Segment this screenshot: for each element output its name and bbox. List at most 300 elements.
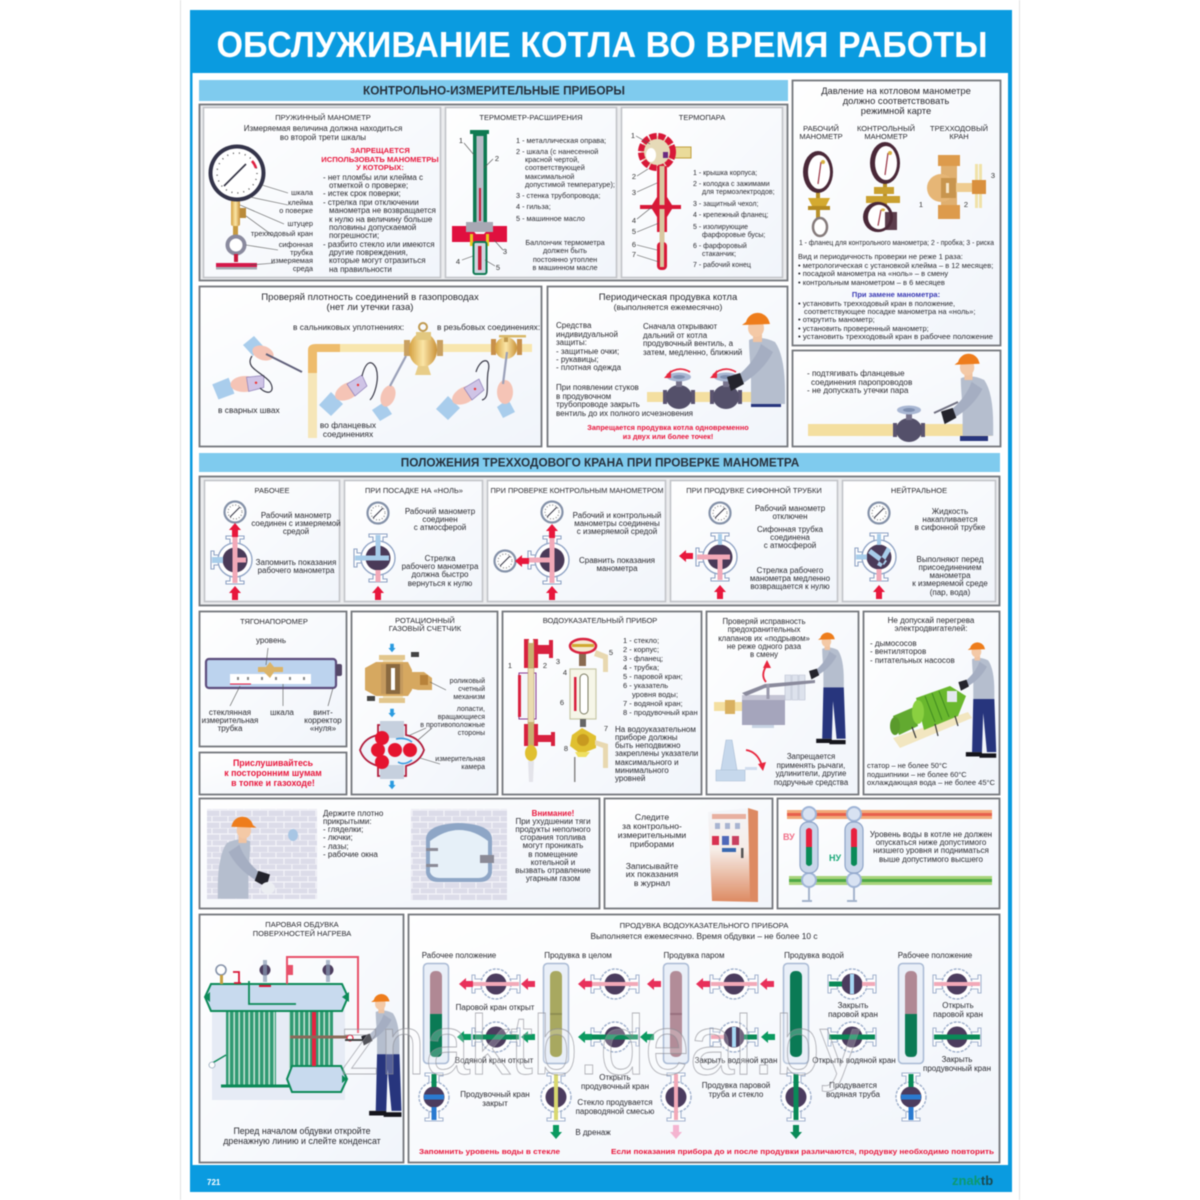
gauge part labels: сифонная xyxy=(279,240,313,249)
level markers xyxy=(783,832,841,863)
heading: indicator blowdown: Выполняется ежемесячно. Время обдувки – не более 10 с xyxy=(590,931,818,941)
gauge part labels: шкала xyxy=(291,188,314,197)
safety valve instructions: предохранительных xyxy=(728,625,800,634)
valve captions: Открыть водяной кран xyxy=(812,1056,896,1065)
thermocouple legend: 7 - рабочий конец xyxy=(693,261,751,269)
heading: pressure: режимной карте xyxy=(861,105,931,116)
temperature limits: подшипники – не более 60°С xyxy=(867,770,967,779)
thermometer note: постоянно утоплен xyxy=(533,255,597,264)
labels: connection types: соединениях xyxy=(323,429,374,439)
text: neutral: манометра xyxy=(929,571,971,580)
prohibition list: на правильности xyxy=(329,265,392,274)
text: zero: вернуться к нулю xyxy=(408,579,472,588)
thermocouple legend: 1 - крышка корпуса; xyxy=(693,170,757,177)
illustration: indicator front view: 5 xyxy=(609,648,613,657)
footer logo: znaktb xyxy=(952,1173,993,1188)
thermometer legend: допустимой температуре); xyxy=(525,180,615,189)
gauge part labels: трубка xyxy=(290,248,314,257)
water indicator note: приборе должны xyxy=(615,733,678,742)
prohibition heading: ИСПОЛЬЗОВАТЬ МАНОМЕТРЫ xyxy=(321,155,439,164)
thermocouple legend: 3 - защитный чехол; xyxy=(693,200,758,208)
icon: cock neutral xyxy=(855,533,896,581)
water indicator legend: 6 - указатель xyxy=(623,681,668,690)
knocking instruction: трубопроводе закрыть xyxy=(556,400,640,409)
draft gauge labels: корректор xyxy=(304,716,342,725)
labels: connection types: во фланцевых xyxy=(320,420,377,430)
temperature limits: охлаждающая вода – не более 45°С xyxy=(867,778,996,787)
title: ОБСЛУЖИВАНИЕ КОТЛА ВО ВРЕМЯ РАБОТЫ xyxy=(216,24,988,65)
water indicator note: минимального xyxy=(615,766,669,775)
heading: pressure: должно соответствовать xyxy=(843,95,949,106)
carbon monoxide warning: могут проникать xyxy=(523,841,583,850)
thermometer legend: красной чертой, xyxy=(525,155,579,164)
water level text: выше допустимого высшего xyxy=(879,855,984,864)
openings list: Держите плотно xyxy=(323,809,384,818)
water indicator legend: 4 - трубка; xyxy=(623,663,659,672)
panel: water level indicator xyxy=(502,612,702,794)
gauge replacement list: соответствующее посадке манометра на «ноль»; xyxy=(804,307,976,316)
thermometer legend: соответствующей xyxy=(525,163,585,172)
illustration: thermometer xyxy=(452,130,507,274)
water indicator legend: 5 - паровой кран; xyxy=(623,672,683,681)
illustration: safety valve and worker xyxy=(714,633,846,744)
water indicator legend: уровня воды; xyxy=(632,690,678,699)
illustration: furnace door xyxy=(411,809,507,900)
warning: blowdown: из двух или более точек! xyxy=(623,432,713,441)
valve captions: труба и стекло xyxy=(709,1090,764,1099)
gauge part labels: штуцер xyxy=(288,219,313,228)
panel: water indicator blowdown xyxy=(408,914,1000,1162)
instructions: flanges: соединения паропроводов xyxy=(811,378,912,387)
thermocouple legend: для термоэлектродов; xyxy=(702,189,775,196)
gauge part labels: измеряемая xyxy=(271,256,313,265)
text: control: Сравнить показания xyxy=(579,556,655,565)
prohibition list: погрешности; xyxy=(329,231,379,240)
heading: blowdown: Периодическая продувка котла xyxy=(599,292,738,303)
gauge part labels: о поверке xyxy=(279,206,313,215)
illustration: threaded joint check hands xyxy=(436,352,515,420)
openings list: - лючки; xyxy=(323,833,353,842)
monitor instruction text: Записывайте xyxy=(626,861,678,871)
gauge and arrows xyxy=(224,502,246,600)
valve captions: водяная труба xyxy=(826,1090,880,1099)
gauges and arrows xyxy=(494,502,562,600)
column labels: РАБОЧИЙ xyxy=(803,124,839,133)
valve captions: Продувочный кран xyxy=(460,1090,530,1099)
openings list: прикрытыми: xyxy=(323,817,372,826)
motor list: - вентиляторов xyxy=(870,647,926,656)
draft gauge labels: «нуля» xyxy=(310,724,337,733)
note: repeat blowdown: Если показания прибора до и после продувки различаются, продувку необходимо повторить xyxy=(611,1147,994,1156)
illustration: gas pipe with valves xyxy=(308,323,532,438)
panel: working position xyxy=(204,480,341,602)
motor list: - питательных насосов xyxy=(870,656,955,665)
thermometer note: Баллончик термометра xyxy=(525,238,606,247)
water indicator note: На водоуказательном xyxy=(615,725,696,734)
warning: levers: применять рычаги, xyxy=(777,761,845,770)
thermometer legend: максимальной xyxy=(525,172,574,181)
text: zero: соединен xyxy=(422,515,458,524)
valve row: steam xyxy=(459,969,981,999)
note: remember level: Запомнить уровень воды в стекле xyxy=(419,1147,560,1156)
column labels: КОНТРОЛЬНЫЙ xyxy=(857,124,915,133)
panel: instruments group xyxy=(200,104,788,280)
level markers: ВУ xyxy=(783,832,795,842)
heading: thermocouple: ТЕРМОПАРА xyxy=(679,113,725,122)
heading: pressure: Давление на котловом манометре xyxy=(821,85,971,96)
panel: motor overheating xyxy=(864,612,1000,794)
openings list: - рабочие окна xyxy=(323,850,378,859)
panel: rotary gas meter: ГАЗОВЫЙ СЧЕТЧИК xyxy=(389,624,462,633)
draft gauge labels: трубка xyxy=(218,724,243,733)
meter labels: роликовый xyxy=(450,677,485,685)
knocking instruction: При появлении стуков xyxy=(556,383,639,392)
heading: gas leak check: Проверяй плотность соединений в газопроводах xyxy=(261,292,479,303)
illustration: gauge assembly xyxy=(208,144,288,270)
panel: neutral: НЕЙТРАЛЬНОЕ xyxy=(891,486,947,495)
text: control: манометры соединены xyxy=(574,519,660,528)
gauge and arrows xyxy=(679,502,730,599)
draft gauge labels: уровень xyxy=(256,636,286,645)
meter labels: измерительная xyxy=(435,756,485,763)
column labels: ТРЕХХОДОВЫЙ xyxy=(930,124,988,133)
text: siphon: соединена xyxy=(770,533,810,542)
valve opening order: Сначала открывают xyxy=(643,322,717,331)
illustration: three-way cock: 2 xyxy=(964,200,968,209)
text: neutral: накапливается xyxy=(922,515,978,524)
monitor instruction text: в журнал xyxy=(634,878,670,888)
illustration: draft gauge xyxy=(206,648,342,706)
text: working: Рабочий манометр xyxy=(261,511,332,520)
text: control: манометра xyxy=(596,564,638,573)
carbon monoxide warning: котельной и xyxy=(531,858,575,867)
illustration: steam and water pipes with glasses xyxy=(787,807,992,902)
illustration: indicator front view: 6 xyxy=(560,698,564,707)
water indicator legend: 3 - фланец; xyxy=(623,654,663,663)
illustration: meter exterior xyxy=(365,652,446,703)
text: working: Запомнить показания xyxy=(256,558,336,567)
protective gear text: - защитные очки; xyxy=(556,347,619,356)
heading: gauge replacement: При замене манометра: xyxy=(852,290,940,299)
panel: draft gauge xyxy=(200,612,346,746)
level markers: НУ xyxy=(829,853,841,863)
water indicator note: максимального и xyxy=(615,758,679,767)
safety valve instructions: клапанов их «подрывом» xyxy=(718,634,810,643)
panel: zero setting xyxy=(344,480,482,602)
panel: periodic boiler blowdown xyxy=(548,286,788,446)
illustration: thermometer: 3 xyxy=(503,247,507,256)
worker sootblowing xyxy=(345,994,401,1117)
prohibition list: - разбито стекло или имеются xyxy=(323,240,435,249)
step headings: Рабочее положение xyxy=(422,951,497,960)
prohibition list: манометра не возвращается xyxy=(329,206,436,215)
thermocouple legend: 2 - колодка с зажимами xyxy=(693,181,770,188)
thermometer note: должен быть xyxy=(543,246,587,255)
monitor instruction text: измерительными xyxy=(618,830,686,840)
valve captions: закрыт xyxy=(482,1099,508,1108)
labels: connection types: в сальниковых уплотнениях: xyxy=(293,322,404,332)
carbon monoxide warning: сгорания топлива xyxy=(520,833,586,842)
prohibition list: - стрелка при отключении xyxy=(323,198,419,207)
monitor instruction text: их показания xyxy=(626,869,679,879)
illustration: boiler xyxy=(204,957,358,1100)
illustration: indicator front view: 2 xyxy=(543,661,547,670)
thermometer legend: 2 - шкала (с нанесенной xyxy=(516,147,598,156)
text: control: с измеряемой средой xyxy=(577,527,657,536)
column labels: КРАН xyxy=(949,132,969,141)
warning: levers: удлинители, другие xyxy=(776,769,846,778)
heading: spring gauge: ПРУЖИННЫЙ МАНОМЕТР xyxy=(275,113,371,122)
panel: spring pressure gauge xyxy=(204,108,440,278)
worker tightening flange xyxy=(808,354,993,442)
meter labels: вращающиеся xyxy=(438,714,485,721)
text: neutral: к измеряемой среде xyxy=(912,579,988,588)
prohibition list: половины допускаемой xyxy=(329,223,416,232)
monitor instruction text: приборами xyxy=(630,839,674,849)
safety valve instructions: Проверяй исправность xyxy=(722,617,806,626)
panel: expansion thermometer xyxy=(446,108,616,278)
text: siphon: манометра медленно xyxy=(750,574,831,583)
panel: pressure must match regime card xyxy=(792,80,1000,346)
panel: draft gauge: ТЯГОНАПОРОМЕР xyxy=(240,617,308,626)
text: neutral: присоединением xyxy=(919,563,981,572)
illustration: indicator front view: 3 xyxy=(556,657,560,666)
text: neutral: в сифонной трубке xyxy=(915,523,986,532)
valve captions: Закрыть водяной кран xyxy=(695,1056,777,1065)
illustration: thermometer: 2 xyxy=(495,154,499,163)
text: zero: рабочего манометра xyxy=(402,562,479,571)
instructions: flanges: - подтягивать фланцевые xyxy=(807,369,905,378)
warning: blowdown: Запрещается продувка котла одновременно xyxy=(587,423,749,432)
carbon monoxide warning: угарным газом xyxy=(526,874,580,883)
column labels: МАНОМЕТР xyxy=(799,132,843,141)
panel: siphon blowing: ПРИ ПРОДУВКЕ СИФОННОЙ ТРУБКИ xyxy=(686,486,822,495)
carbon monoxide warning: Внимание! xyxy=(532,809,574,818)
callout: listen for noises xyxy=(200,752,346,794)
illustration: thermometer: 5 xyxy=(496,263,500,272)
check frequency list: • посадкой манометра на «ноль» – в смену xyxy=(798,269,948,278)
panel: rotary gas meter: РОТАЦИОННЫЙ xyxy=(395,616,455,625)
illustration: thermocouple: 7 xyxy=(632,250,636,259)
monitor instruction text: Следите xyxy=(635,812,669,822)
prohibition list: - нет пломбы или клейма с xyxy=(323,173,423,182)
callout: listen for noises: к посторонним шумам xyxy=(224,768,322,778)
gauge replacement list: • установить трехходовый кран в положение, xyxy=(798,299,955,308)
gauge replacement list: • установить трехходовый кран в рабочее положение xyxy=(798,332,993,341)
illustration: flange check hands xyxy=(319,356,406,421)
illustration: control cabinet xyxy=(708,808,758,902)
heading: sootblowing: ПАРОВАЯ ОБДУВКА xyxy=(265,920,339,929)
protective gear text: - рукавицы; xyxy=(556,355,599,364)
sootblowing note: Перед началом обдувки откройте xyxy=(233,1126,371,1136)
illustration: lifting device xyxy=(716,740,766,781)
gauge and arrow xyxy=(368,502,388,600)
panel: rotary gas meter xyxy=(352,612,498,794)
panel: gas pipeline leak check xyxy=(200,286,542,446)
valve opening order: продувочный вентиль, а xyxy=(643,339,734,348)
illustration: indicator front view xyxy=(508,639,613,782)
meter labels: счетный xyxy=(458,685,485,693)
text: zero: Стрелка xyxy=(425,554,456,563)
illustration: welded seam check hands xyxy=(208,336,302,415)
text: siphon: Рабочий манометр xyxy=(755,504,826,513)
draft gauge labels: шкала xyxy=(270,708,294,717)
illustration: control gauge xyxy=(863,142,900,232)
meter labels: механизм xyxy=(453,694,485,701)
panel: control gauge check xyxy=(488,480,666,602)
valve captions: В дренаж xyxy=(575,1128,611,1137)
gauge glasses xyxy=(424,964,924,1064)
water indicator note: уровней xyxy=(615,774,645,783)
valve row: blowdown xyxy=(419,1073,926,1139)
illustration: thermometer: 1 xyxy=(459,136,463,145)
text: zero: Рабочий манометр xyxy=(405,507,476,516)
text: siphon: Сифонная трубка xyxy=(757,525,824,534)
draft gauge labels: стеклянная xyxy=(209,708,251,717)
water level text: Уровень воды в котле не должен xyxy=(870,830,992,839)
panel: thermocouple xyxy=(622,108,782,278)
panel: steam sootblowing xyxy=(200,914,404,1162)
carbon monoxide warning: продукты неполного xyxy=(515,825,591,834)
valve captions: продувочный кран xyxy=(923,1064,991,1073)
water indicator note: быть неподвижно xyxy=(615,741,681,750)
labels: connection types xyxy=(218,322,540,439)
prohibition list: которые могут отразиться xyxy=(329,256,426,265)
heading: indicator blowdown: ПРОДУВКА ВОДОУКАЗАТЕЛЬНОГО ПРИБОРА xyxy=(620,921,789,930)
valve captions: Стекло продувается xyxy=(577,1098,653,1107)
text: working: средой xyxy=(283,527,309,536)
valve captions: паровой кран xyxy=(828,1010,878,1019)
water indicator legend: 8 - продувочный кран xyxy=(623,708,698,717)
panel: safety valve check xyxy=(706,612,858,794)
illustration: indicator front view: 4 xyxy=(563,668,567,677)
illustration: three-way cock: 1 xyxy=(919,200,923,209)
gauge and arrow xyxy=(868,502,890,599)
section heading: instruments: КОНТРОЛЬНО-ИЗМЕРИТЕЛЬНЫЕ ПРИБОРЫ xyxy=(363,84,625,98)
meter labels: камера xyxy=(461,764,485,771)
thermocouple legend: 4 - крепежный фланец; xyxy=(693,211,768,219)
valve captions: Паровой кран открыт xyxy=(456,1003,535,1012)
valve captions: паровой кран xyxy=(933,1010,983,1019)
warning: levers: подручные средства xyxy=(774,778,849,787)
step headings: Продувка водой xyxy=(784,951,844,960)
valve row: water xyxy=(457,1022,981,1052)
flow arrows xyxy=(388,644,396,789)
valve opening order: затем, медленно, ближний xyxy=(643,348,742,357)
gauge part labels: клейма xyxy=(288,198,314,207)
column labels: МАНОМЕТР xyxy=(864,132,908,141)
thermocouple legend: стаканчик; xyxy=(702,251,736,258)
panel: zero setting: ПРИ ПОСАДКЕ НА «НОЛЬ» xyxy=(365,486,463,495)
panel: monitor instruments xyxy=(604,798,772,908)
illustration: thermocouple: 5 xyxy=(632,227,636,236)
thermocouple legend: 5 - изолирующие xyxy=(693,224,748,231)
illustration: indicator front view: 8 xyxy=(564,744,568,753)
prohibition list: - истек срок поверки; xyxy=(323,189,401,198)
openings list: - лазы; xyxy=(323,842,349,851)
illustration: thermocouple xyxy=(631,131,691,270)
worker at blowdown valves xyxy=(647,313,785,409)
valve captions: Закрыть xyxy=(838,1001,868,1010)
illustration: indicator front view: 7 xyxy=(604,724,608,733)
valve captions: Продувка паровой xyxy=(702,1081,770,1090)
draft gauge labels: измерительная xyxy=(202,716,258,725)
illustration: thermocouple: 2 xyxy=(632,172,636,181)
step headings: Продувка паром xyxy=(664,951,724,960)
check frequency list: • метрологическая с установкой клейма – в 12 месяцев; xyxy=(798,261,993,270)
knocking instruction: в продувочном xyxy=(556,392,611,401)
sootblowing note: дренажную линию и слейте конденсат xyxy=(223,1136,381,1146)
valve captions: Открыть xyxy=(942,1001,974,1010)
watermark: znaktb.deal.by xyxy=(340,998,860,1092)
text: working: рабочего манометра xyxy=(258,566,335,575)
illustration: three-way cock: 3 xyxy=(991,171,995,180)
prohibition list: отметкой о проверке; xyxy=(329,181,408,190)
panel: control gauge check: ПРИ ПРОВЕРКЕ КОНТРОЛЬНЫМ МАНОМЕТРОМ xyxy=(490,486,664,495)
valve captions: продувочный кран xyxy=(581,1082,649,1091)
step headings: Рабочее положение xyxy=(898,951,973,960)
step headings: Продувка в целом xyxy=(544,951,612,960)
illustration: motor and worker xyxy=(890,642,996,758)
thermocouple legend: 6 - фарфоровый xyxy=(693,242,747,250)
panel: keep openings closed xyxy=(200,798,600,908)
heading: gas leak check: (нет ли утечки газа) xyxy=(327,302,413,313)
prohibition list: к нулю на величину больше xyxy=(329,215,433,224)
heading: motors: Не допускай перегрева xyxy=(888,616,975,625)
panel: neutral xyxy=(842,480,996,602)
prohibition heading: У КОТОРЫХ: xyxy=(356,163,404,172)
illustration: indicator front view: 1 xyxy=(508,661,512,670)
gauge part labels: среда xyxy=(293,264,314,273)
thermometer legend: 1 - металлическая оправа; xyxy=(516,136,606,145)
illustration: thermometer: 4 xyxy=(456,257,460,266)
valve captions: Закрыть xyxy=(942,1055,972,1064)
prohibition heading: ЗАПРЕЩАЕТСЯ xyxy=(350,146,410,155)
heading: motors: электродвигателей: xyxy=(895,624,967,633)
section heading: three-way cock positions xyxy=(199,453,1000,472)
caption: cock parts: 1 - фланец для контрольного манометра; 2 - пробка; 3 - риска xyxy=(799,238,995,247)
text: working: соединен с измеряемой xyxy=(251,519,341,528)
heading: thermometer: ТЕРМОМЕТР-РАСШИРЕНИЯ xyxy=(479,113,583,122)
protective gear text: индивидуальной xyxy=(556,330,618,339)
callout: listen for noises: в топке и газоходе! xyxy=(231,778,315,788)
icon: cock control xyxy=(528,536,569,584)
protective gear text: - плотная одежда xyxy=(556,363,622,372)
text: control: Рабочий и контрольный xyxy=(573,511,661,520)
illustration: indicator side section xyxy=(518,638,555,782)
thermocouple legend: фарфоровые бусы; xyxy=(702,231,765,239)
water level text: низшего уровня и подниматься xyxy=(873,846,989,855)
panel: three-way cock group xyxy=(200,476,1000,606)
text: zero: с атмосферой xyxy=(414,523,466,532)
instructions: flanges: - не допускать утечки пара xyxy=(807,386,909,395)
heading: sootblowing: ПОВЕРХНОСТЕЙ НАГРЕВА xyxy=(253,929,351,938)
callout: listen for noises: Прислушивайтесь xyxy=(233,758,314,768)
thermometer legend: 3 - стенка трубопровода; xyxy=(516,191,600,200)
gauge part labels: трехходовый кран xyxy=(251,229,313,238)
panel: tighten steam flanges xyxy=(792,350,1000,446)
thermometer legend: 5 - машинное масло xyxy=(516,214,585,223)
panel: water level indicator: ВОДОУКАЗАТЕЛЬНЫЙ ПРИБОР xyxy=(543,616,657,625)
section heading: instruments xyxy=(199,80,788,101)
water indicator legend: 1 - стекло; xyxy=(623,636,659,645)
water indicator note: закреплены указатели xyxy=(615,749,698,758)
labels: connection types: в сварных швах xyxy=(218,405,281,415)
illustration: thermocouple: 4 xyxy=(632,216,636,225)
warning: levers: Запрещается xyxy=(787,752,835,761)
text: siphon: Стрелка рабочего xyxy=(757,566,824,575)
illustration: thermocouple: 6 xyxy=(632,240,636,249)
